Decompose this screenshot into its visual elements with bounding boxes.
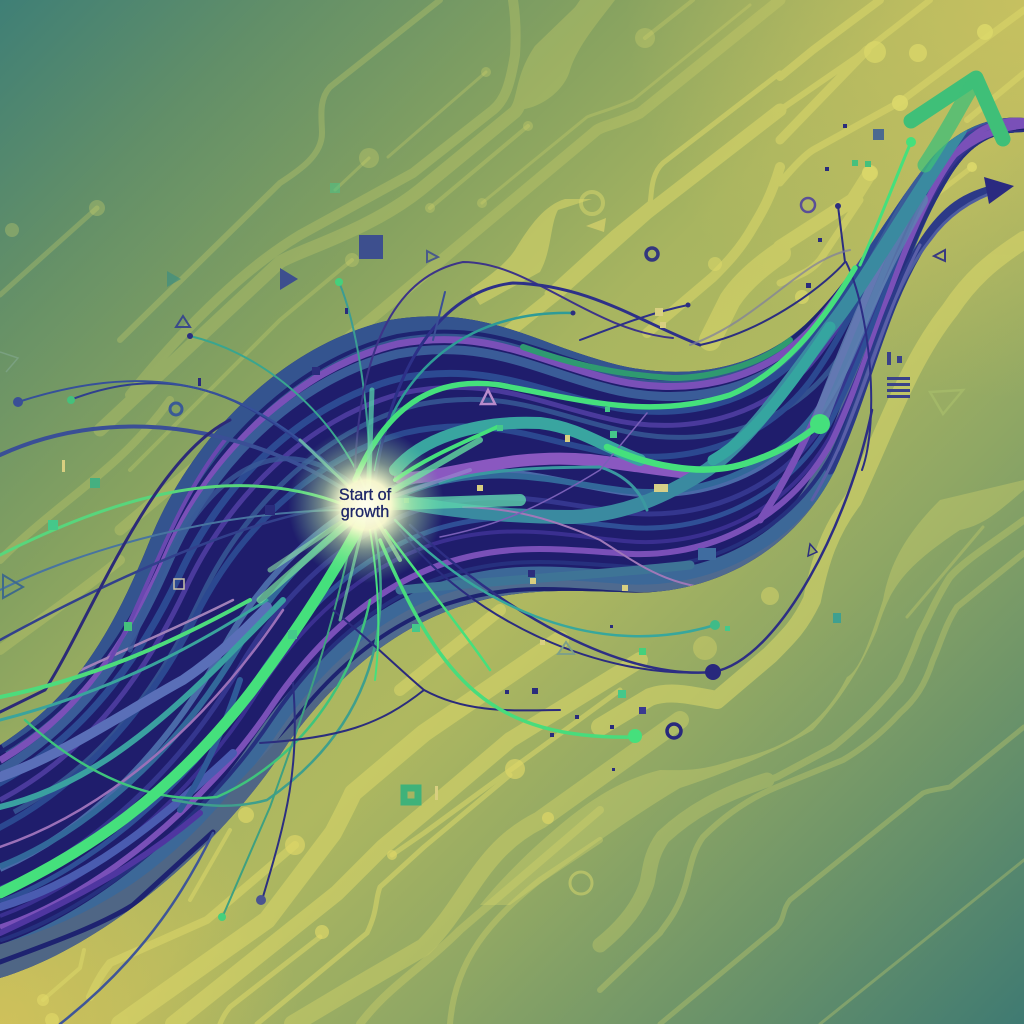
strand: thin to top node [860,142,911,265]
ring and triangle outlines in background [570,192,603,894]
floating shapes: rings [170,198,815,738]
background traces: lower right [600,520,1024,1024]
label: start of growth: Start of [339,486,392,504]
arrowhead: navy [984,177,1014,204]
strand: curl to large node [607,424,820,470]
floating shapes: triangles [0,218,963,654]
strands: teal and purple through centre [110,125,1024,660]
background traces: upper left [0,0,780,650]
background trace nodes: central and right [693,24,993,660]
icon: stacked bars [887,352,910,398]
burst rays [260,390,520,620]
strand end nodes [13,137,916,921]
thin radiating lines [0,206,872,1024]
background trace nodes: lower left [37,759,554,1024]
center burst [260,390,520,620]
bright green strands [0,142,911,893]
scattered particles [48,124,847,800]
burst glow [288,427,444,583]
strand: thick lower-left [0,525,360,893]
center burst: growth [341,503,389,521]
background traces: lower left [43,610,680,1024]
secondary arrow strand [812,188,1000,500]
background band: large right [480,480,1024,905]
strand: upper right sweep [355,268,855,480]
arrowhead: green chevron [911,78,1003,165]
floating shapes: squares [90,129,884,802]
background trace nodes: upper left [5,28,655,267]
strands: lower left bundle [0,600,333,962]
background traces: central diagonal [470,0,1024,727]
